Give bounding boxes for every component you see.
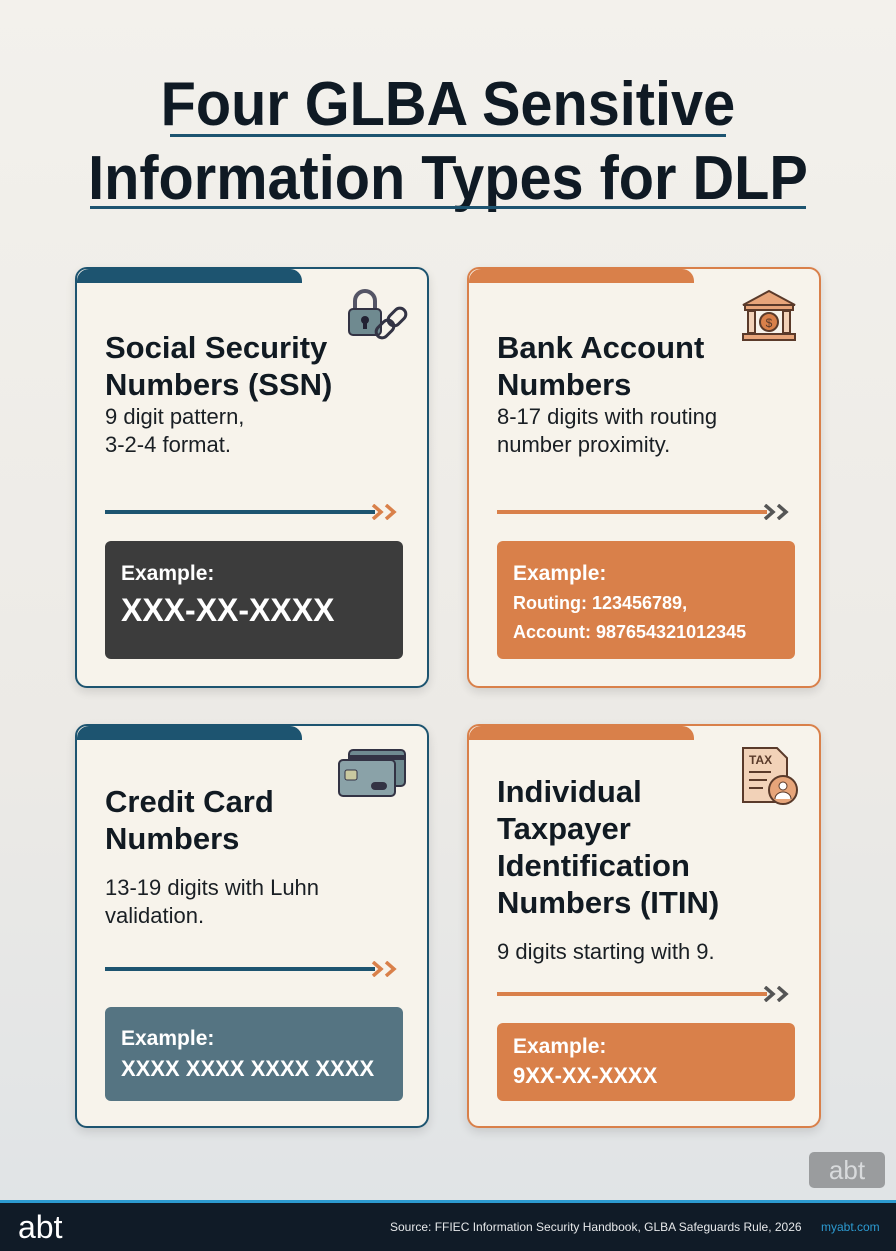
example box: 9XX-XX-XXXX — [513, 1063, 657, 1088]
heading: Numbers (SSN) — [105, 367, 332, 402]
panel: Credit card — [75, 724, 429, 1128]
text — [105, 404, 244, 457]
heading — [105, 784, 274, 856]
text: Information Types for DLP — [88, 144, 808, 213]
icon: tax document — [742, 747, 798, 805]
panel: SSN — [75, 267, 429, 688]
text: 8-17 digits with routing — [497, 404, 717, 429]
icon: tax document: TAX — [749, 753, 772, 767]
panel: Bank account — [467, 267, 821, 688]
arrow — [105, 961, 396, 977]
watermark logo: abt — [829, 1155, 865, 1185]
example box: XXX-XX-XXXX — [121, 592, 334, 628]
watermark logo — [809, 1152, 885, 1188]
text: 9 digit pattern, — [105, 404, 244, 429]
example box: Routing: 123456789, — [513, 593, 687, 613]
heading: Numbers — [105, 821, 239, 856]
source text: Source: FFIEC Information Security Handbook, GLBA Safeguards Rule, 2026 — [390, 1220, 802, 1234]
heading — [105, 330, 332, 402]
footer — [0, 1200, 896, 1251]
heading: Bank Account — [497, 330, 704, 365]
title — [88, 70, 808, 213]
heading: Numbers — [497, 367, 631, 402]
arrow — [497, 504, 788, 520]
icon: bank — [742, 290, 796, 341]
example box: XXXX XXXX XXXX XXXX — [121, 1056, 374, 1081]
heading: Identification — [497, 848, 690, 883]
text: 13-19 digits with Luhn — [105, 875, 319, 900]
example box — [497, 1023, 795, 1101]
heading: Credit Card — [105, 784, 274, 819]
arrow — [497, 986, 788, 1002]
example box: Example: — [513, 1035, 606, 1058]
panel: ITIN — [467, 724, 821, 1128]
website: myabt.com — [821, 1220, 880, 1234]
text: number proximity. — [497, 432, 670, 457]
arrow — [105, 504, 396, 520]
text — [497, 404, 717, 457]
heading: Numbers (ITIN) — [497, 885, 719, 920]
icon: credit cards — [338, 749, 406, 797]
example box — [497, 541, 795, 659]
text: 3-2-4 format. — [105, 432, 231, 457]
heading — [497, 330, 704, 402]
heading: Social Security — [105, 330, 327, 365]
example box — [105, 1007, 403, 1101]
text — [105, 875, 319, 928]
heading — [497, 774, 719, 920]
heading: Taxpayer — [497, 811, 631, 846]
text: Four GLBA Sensitive — [161, 70, 735, 139]
text: validation. — [105, 903, 204, 928]
footer logo: abt — [18, 1209, 62, 1245]
example box: Example: — [121, 1027, 214, 1050]
example box: Example: — [121, 562, 214, 585]
example box: Account: 987654321012345 — [513, 622, 746, 642]
text: 9 digits starting with 9. — [497, 939, 715, 964]
icon: bank: $ — [766, 316, 773, 330]
heading: Individual — [497, 774, 642, 809]
example box: Example: — [513, 562, 606, 585]
example box — [105, 541, 403, 659]
icon: lock and chain — [348, 289, 408, 340]
